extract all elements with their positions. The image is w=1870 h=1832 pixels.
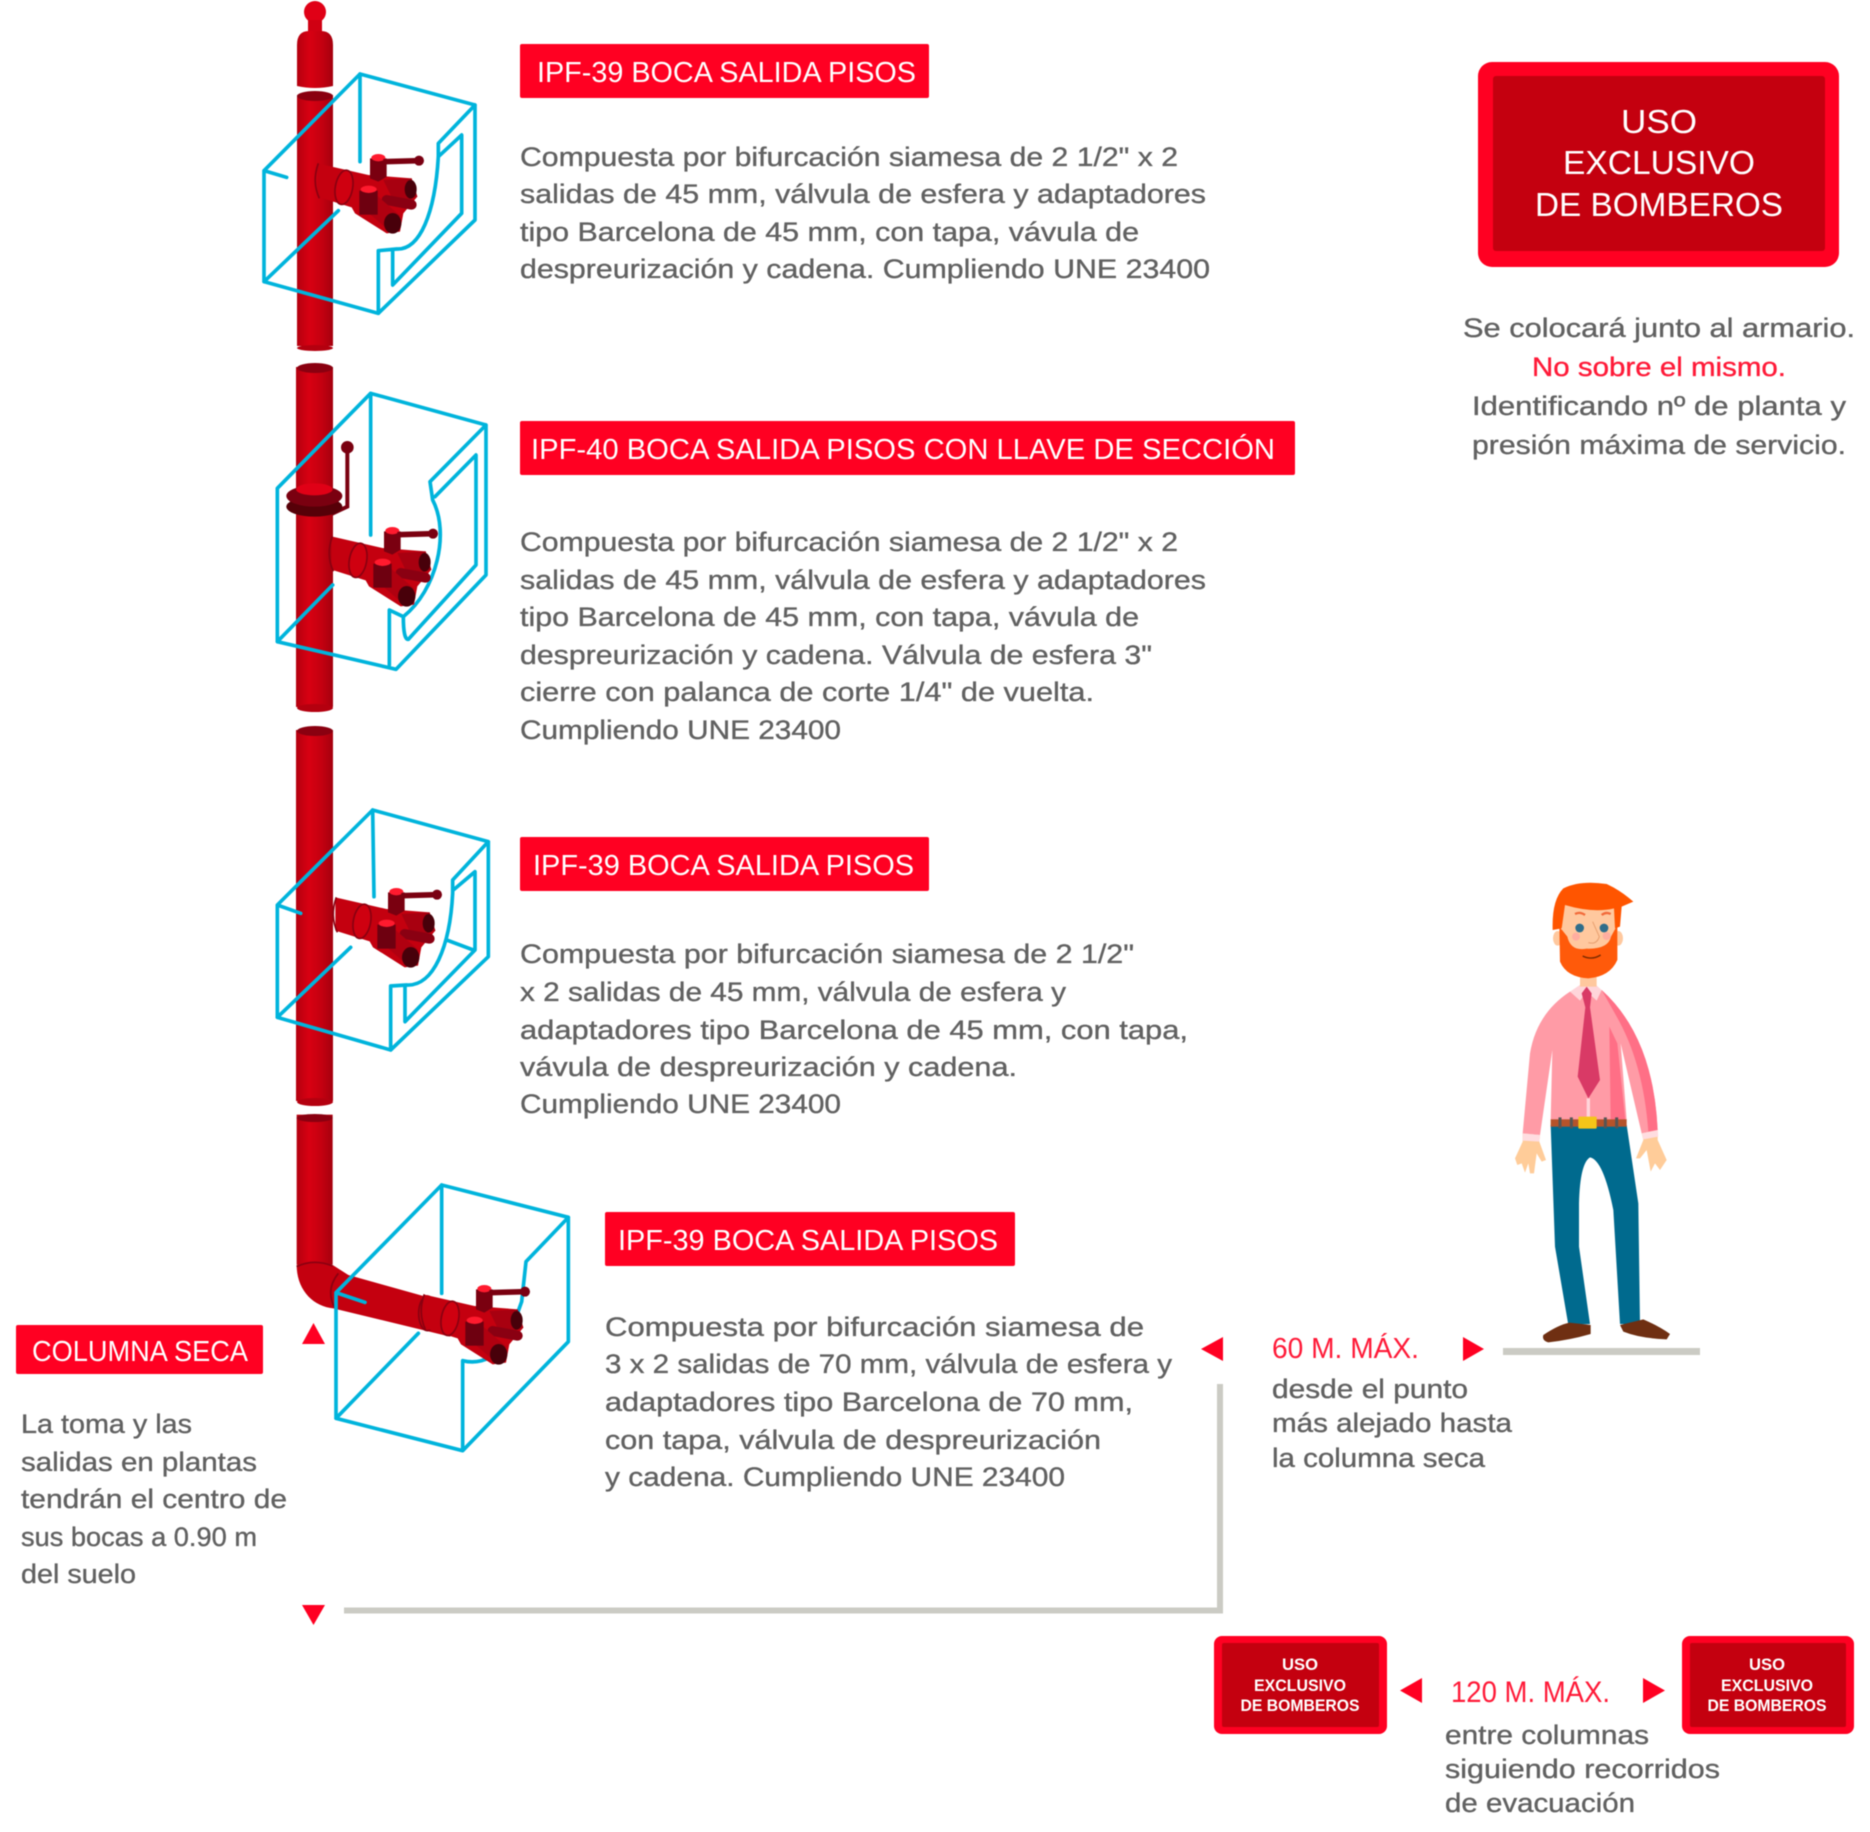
text block: IPF-40: tipo Barcelona de 45 mm, con tapa, vávula de [520, 602, 1139, 632]
ground line [1503, 1348, 1700, 1355]
text block: IPF-39 first: tipo Barcelona de 45 mm, con tapa, vávula de [520, 217, 1139, 247]
pipe: fourth segment with elbow [297, 1114, 473, 1337]
valve 3 [333, 888, 442, 968]
small sign right [1682, 1636, 1854, 1734]
valve 4 [421, 1285, 530, 1365]
arrow: height down [302, 1605, 325, 1625]
small sign right: USO [1749, 1655, 1785, 1674]
cabinet 1 outline [264, 74, 475, 313]
heading: IPF-39 first: IPF-39 BOCA SALIDA PISOS [537, 57, 916, 89]
small sign left: USO [1282, 1655, 1318, 1674]
text block: IPF-39 third: adaptadores tipo Barcelona de 70 mm, [605, 1387, 1133, 1417]
text block: sign note: Se colocará junto al armario. [1463, 313, 1855, 343]
text block: IPF-39 second: x 2 salidas de 45 mm, válvula de esfera y [520, 977, 1067, 1007]
distance: 60 m: desde el punto [1272, 1374, 1468, 1404]
heading: IPF-39 third [605, 1212, 1015, 1266]
distance: 120 m [1445, 1676, 1720, 1818]
text block: IPF-39 second [520, 939, 1188, 1119]
heading: IPF-39 third: IPF-39 BOCA SALIDA PISOS [618, 1225, 998, 1257]
distance: 60 m [1272, 1332, 1513, 1473]
heading: columna seca: COLUMNA SECA [32, 1336, 249, 1368]
cabinet 3 outline [277, 810, 488, 1050]
distance: 120 m: siguiendo recorridos [1445, 1754, 1720, 1784]
heading: IPF-39 second [520, 837, 929, 891]
text block: columna seca: tendrán el centro de [21, 1484, 287, 1514]
figure: man [1515, 883, 1670, 1342]
pipe: top cap and first column segment [297, 1, 333, 351]
text block: IPF-39 second: vávula de despreurización y cadena. [520, 1052, 1017, 1082]
text block: IPF-39 first: salidas de 45 mm, válvula de esfera y adaptadores [520, 179, 1206, 209]
small sign right: EXCLUSIVO [1721, 1676, 1813, 1695]
arrow: 60 m right [1463, 1337, 1484, 1361]
big sign: DE BOMBEROS [1535, 186, 1783, 223]
distance: 120 m: 120 M. MÁX. [1451, 1676, 1610, 1709]
heading: columna seca [16, 1325, 263, 1374]
small sign left [1214, 1636, 1387, 1734]
text block: sign note [1463, 313, 1855, 460]
text block: IPF-40: Compuesta por bifurcación siamesa de 2 1/2" x 2 [520, 527, 1178, 557]
text block: IPF-39 third: con tapa, válvula de despreurización [605, 1425, 1101, 1455]
arrow: height up [302, 1323, 325, 1344]
pipe: second column segment with section valve [296, 363, 333, 712]
arrow: 120 m left [1400, 1678, 1422, 1703]
text block: IPF-39 first [520, 142, 1210, 284]
text block: IPF-39 first: Compuesta por bifurcación siamesa de 2 1/2" x 2 [520, 142, 1178, 172]
text block: sign note: Identificando nº de planta y [1472, 391, 1847, 421]
distance: 60 m: más alejado hasta [1272, 1408, 1513, 1438]
text block: columna seca [21, 1409, 287, 1589]
distance: 60 m: la columna seca [1272, 1443, 1486, 1473]
pipe: third column segment [296, 726, 333, 1106]
text block: IPF-39 second: Compuesta por bifurcación siamesa de 2 1/2" [520, 939, 1134, 969]
text block: IPF-40: salidas de 45 mm, válvula de esfera y adaptadores [520, 565, 1206, 595]
text block: IPF-39 second: Cumpliendo UNE 23400 [520, 1089, 841, 1119]
floor line [344, 1384, 1220, 1610]
cabinet 4 outline [336, 1185, 568, 1451]
text block: IPF-39 first: despreurización y cadena. Cumpliendo UNE 23400 [520, 254, 1210, 284]
text block: sign note: presión máxima de servicio. [1472, 430, 1846, 460]
text block: IPF-40: despreurización y cadena. Válvula de esfera 3" [520, 640, 1152, 670]
big sign: USO [1621, 103, 1697, 140]
arrow: 60 m left [1201, 1337, 1223, 1361]
distance: 120 m: de evacuación [1445, 1788, 1635, 1818]
heading: IPF-40 [520, 421, 1295, 475]
text block: columna seca: salidas en plantas [21, 1447, 257, 1477]
text block: IPF-39 third: y cadena. Cumpliendo UNE 23400 [605, 1462, 1065, 1492]
cabinet 2 outline [277, 393, 486, 669]
heading: IPF-40: IPF-40 BOCA SALIDA PISOS CON LLAVE DE SECCIÓN [531, 433, 1275, 466]
small sign right: DE BOMBEROS [1708, 1696, 1826, 1715]
text block: IPF-39 third [605, 1312, 1173, 1492]
big sign: EXCLUSIVO [1563, 144, 1755, 181]
text block: IPF-39 third: 3 x 2 salidas de 70 mm, válvula de esfera y [605, 1349, 1173, 1379]
distance: 120 m: entre columnas [1445, 1720, 1649, 1750]
distance: 60 m: 60 M. MÁX. [1272, 1332, 1419, 1365]
heading: IPF-39 second: IPF-39 BOCA SALIDA PISOS [533, 850, 914, 882]
small sign left: EXCLUSIVO [1254, 1676, 1346, 1695]
big sign [1478, 62, 1839, 267]
text block: columna seca: del suelo [21, 1559, 136, 1589]
text block: IPF-39 third: Compuesta por bifurcación siamesa de [605, 1312, 1144, 1342]
text block: IPF-40 [520, 527, 1206, 745]
arrow: 120 m right [1643, 1678, 1665, 1703]
section valve with lever [286, 441, 354, 517]
text block: IPF-40: Cumpliendo UNE 23400 [520, 715, 841, 745]
valve 2 [329, 527, 438, 607]
text block: columna seca: sus bocas a 0.90 m [21, 1522, 257, 1552]
text block: columna seca: La toma y las [21, 1409, 192, 1439]
valve 1 [315, 154, 424, 234]
text block: sign note: No sobre el mismo. [1532, 352, 1786, 382]
text block: IPF-40: cierre con palanca de corte 1/4" de vuelta. [520, 677, 1094, 707]
small sign left: DE BOMBEROS [1240, 1696, 1360, 1715]
heading: IPF-39 first [520, 44, 929, 98]
text block: IPF-39 second: adaptadores tipo Barcelona de 45 mm, con tapa, [520, 1015, 1188, 1045]
